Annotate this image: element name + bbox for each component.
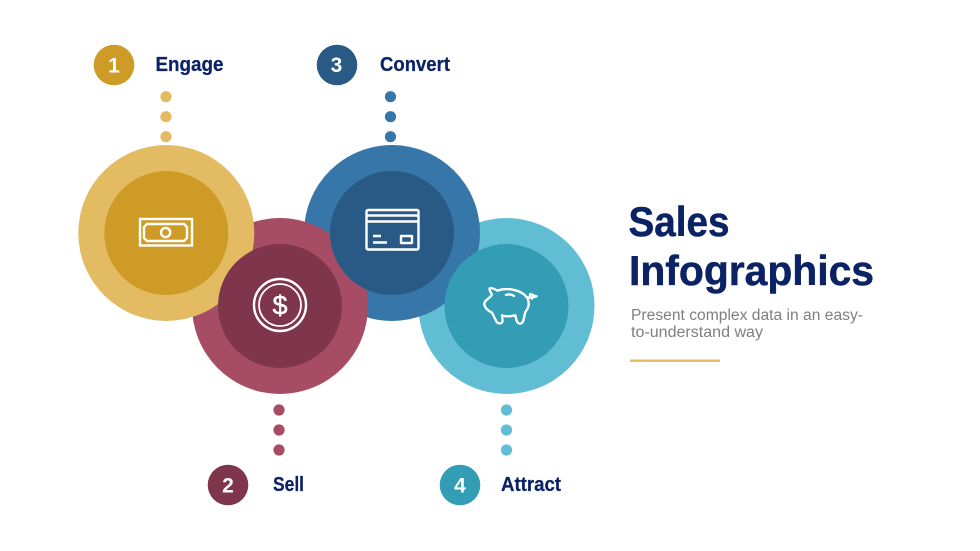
label: 4 Attract [440,465,561,505]
icon: piggy bank [484,288,537,324]
dots: Sell connector [273,404,285,456]
accent line [630,360,720,362]
outer circles [78,145,595,394]
title: Infographics [629,247,874,294]
icon: credit card [366,210,418,250]
icon: dollar coin [254,279,306,331]
label: 4 Attract: Attract [501,474,561,496]
label: 4 Attract: 4 [454,474,466,498]
label: 2 Sell [208,465,304,505]
label: 3 Convert [317,45,450,85]
label: 3 Convert: 3 [331,54,342,77]
subtitle [631,307,863,341]
dots: Convert connector [385,91,396,142]
title [628,198,874,294]
subtitle: Present complex data in an easy- [631,307,863,324]
inner circles [104,171,569,368]
dots: Engage connector [160,91,172,142]
label: 2 Sell: Sell [273,474,304,496]
label: 2 Sell: 2 [222,474,234,498]
title: Sales [628,198,730,245]
label: 3 Convert: Convert [380,54,450,76]
label: 1 Engage: 1 [108,54,120,78]
icon: banknote [140,219,192,246]
dots: Attract connector [501,404,512,456]
label: 1 Engage: Engage [156,54,224,76]
label: 1 Engage [94,45,224,85]
subtitle: to-understand way [631,324,763,341]
icon: dollar coin: $ [272,290,288,320]
